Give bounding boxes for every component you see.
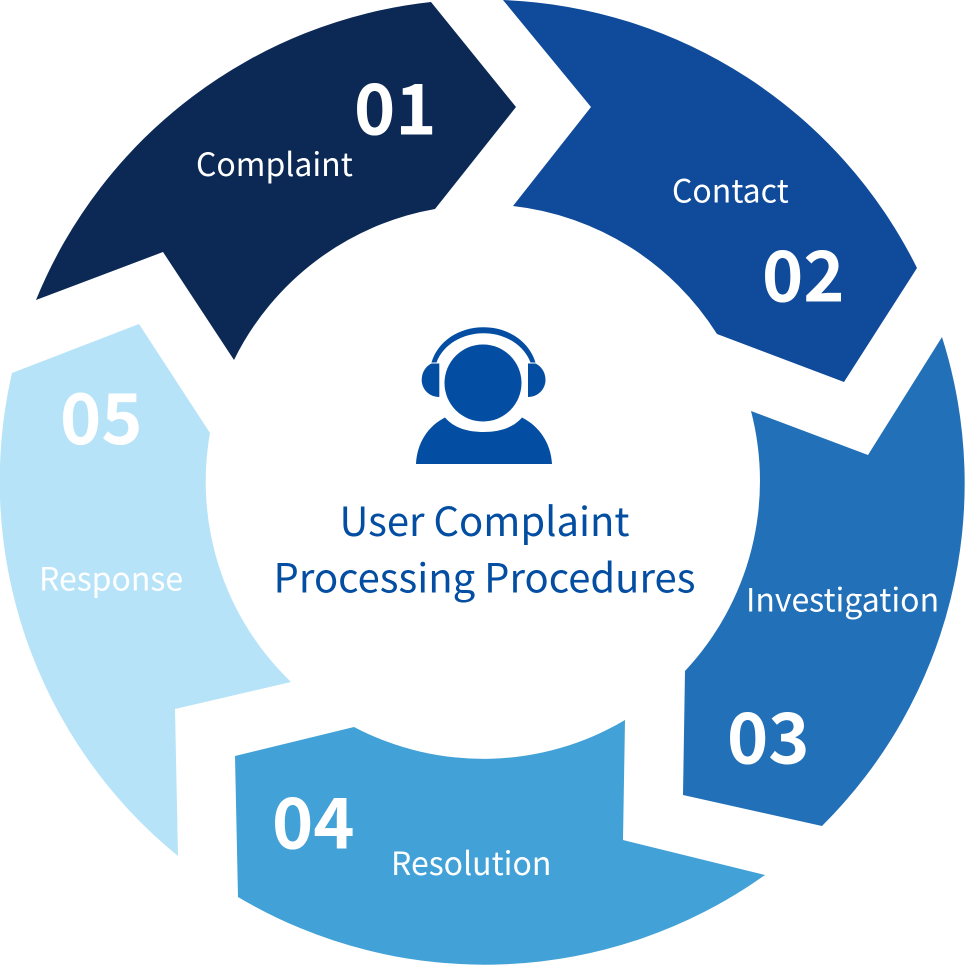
step label Contact: Contact bbox=[672, 166, 789, 212]
step number 03: 03 bbox=[727, 684, 810, 784]
step label Resolution: Resolution bbox=[391, 839, 551, 885]
center title bbox=[274, 490, 695, 604]
segment 02: Contact bbox=[503, 0, 917, 382]
step label Investigation: Investigation bbox=[746, 576, 939, 622]
center title: Processing Procedures bbox=[274, 546, 695, 604]
step number 05: 05 bbox=[60, 364, 143, 465]
segment 01: Complaint bbox=[36, 2, 516, 360]
step label Response: Response bbox=[39, 554, 183, 600]
center title: User Complaint bbox=[340, 490, 630, 548]
step number 02: 02 bbox=[762, 222, 845, 322]
segment 05: Response bbox=[0, 324, 291, 856]
segment 03: Investigation bbox=[683, 337, 965, 826]
step number 04: 04 bbox=[272, 768, 355, 870]
step number 01: 01 bbox=[354, 54, 437, 156]
segment 04: Resolution bbox=[235, 720, 765, 965]
step label Complaint: Complaint bbox=[196, 140, 353, 186]
icon: agent with headset bbox=[416, 327, 552, 464]
